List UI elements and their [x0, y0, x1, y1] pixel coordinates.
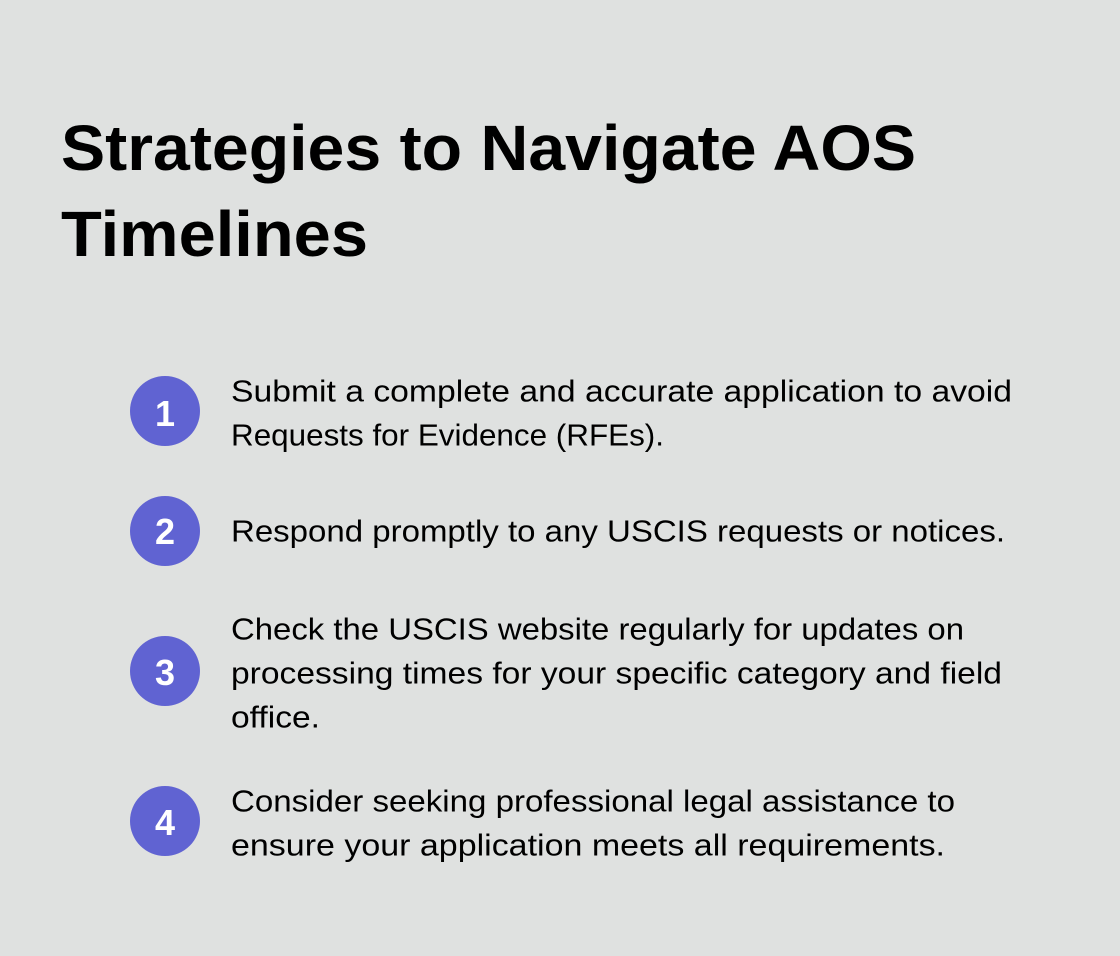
- number badge 4: 4: [155, 802, 175, 843]
- title: Strategies to Navigate AOS: [61, 112, 916, 184]
- step 1 text: Submit a complete and accurate application to avoid: [231, 374, 1012, 408]
- number badge 2: [130, 496, 200, 566]
- number badge 1: 1: [155, 393, 175, 434]
- step 2 text: Respond promptly to any USCIS requests or notices.: [231, 514, 1005, 548]
- step 1: [130, 374, 1012, 452]
- number badge 4: [130, 786, 200, 856]
- number badge 1: [130, 376, 200, 446]
- step 4: [130, 784, 955, 862]
- step 2: [130, 496, 1005, 566]
- title: Timelines: [61, 198, 368, 270]
- number badge 2: 2: [155, 511, 175, 552]
- number badge 3: [130, 636, 200, 706]
- step 3 text: processing times for your specific category and field: [231, 656, 1002, 690]
- step 3: [130, 612, 1002, 734]
- step 4 text: Consider seeking professional legal assistance to: [231, 784, 955, 818]
- step 1 text: [231, 374, 1012, 452]
- title: [61, 112, 916, 270]
- step 3 text: [231, 612, 1002, 734]
- step 1 text: Requests for Evidence (RFEs).: [231, 418, 664, 452]
- number badge 3: 3: [155, 652, 175, 693]
- step 4 text: ensure your application meets all requirements.: [231, 828, 945, 862]
- step 4 text: [231, 784, 955, 862]
- step 3 text: Check the USCIS website regularly for updates on: [231, 612, 964, 646]
- step 3 text: office.: [231, 700, 320, 734]
